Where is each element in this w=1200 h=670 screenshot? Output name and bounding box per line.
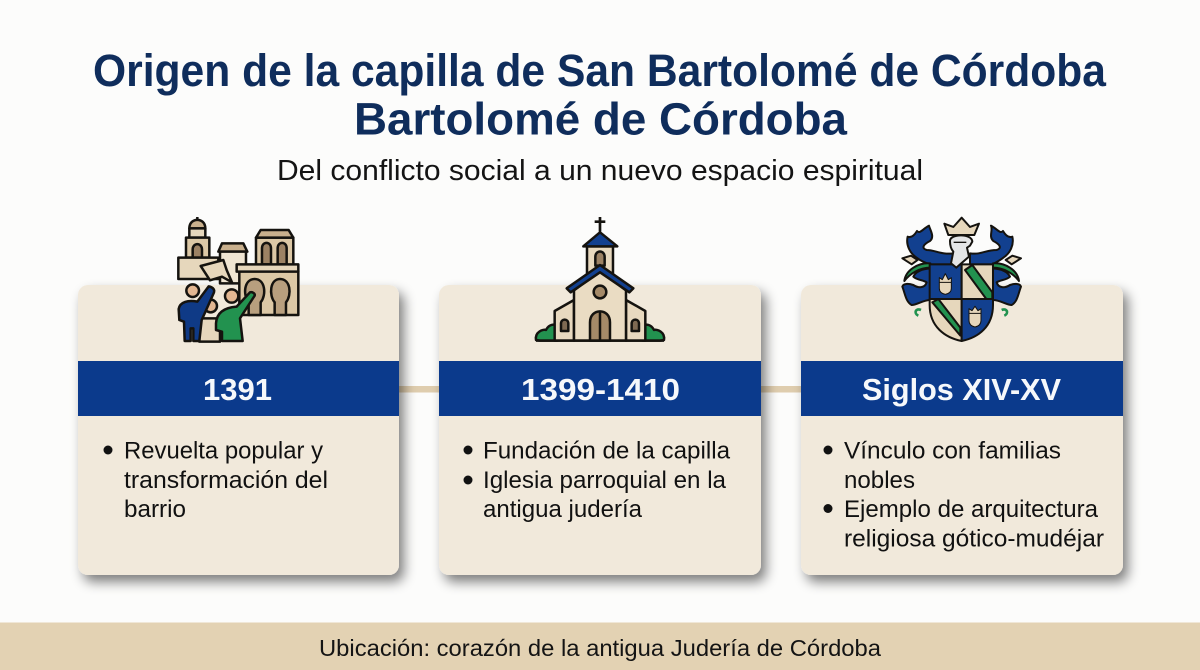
bullet list: Siglos XIV-XV: Ejemplo de arquitectura: [844, 496, 1099, 523]
panel: 1399-1410: [439, 285, 761, 575]
footer band: [0, 622, 1200, 670]
year band: 1399-1410: [439, 361, 761, 416]
title: Bartolomé de Córdoba: [354, 94, 848, 144]
icon: coat of arms: [902, 218, 1021, 341]
bullet list: Siglos XIV-XV: Vínculo con familias: [844, 438, 1061, 464]
panel: Siglos XIV-XV: [801, 285, 1123, 575]
panel: 1391: [78, 285, 399, 575]
year band: Siglos XIV-XV: [801, 361, 1123, 416]
bullet list: 1391: barrio: [124, 496, 186, 523]
year band: 1391: [78, 361, 399, 416]
icon: revolt in the quarter: [178, 217, 298, 342]
bullet list: 1399-1410: [464, 438, 731, 523]
footer band: Ubicación: corazón de la antigua Judería de Córdoba: [319, 635, 881, 661]
bullet list: Siglos XIV-XV: nobles: [844, 467, 915, 494]
title: Origen de la capilla de San Bartolomé de Córdoba: [93, 45, 1107, 96]
title: [93, 45, 1107, 144]
bullet list: 1399-1410: Iglesia parroquial en la: [483, 467, 727, 494]
subtitle: Del conflicto social a un nuevo espacio espiritual: [277, 155, 923, 187]
connector: 1399-1410 to Siglos XIV-XV: [757, 386, 805, 392]
year band: 1399-1410: 1399-1410: [521, 372, 680, 407]
bullet list: 1391: Revuelta popular y: [124, 438, 323, 464]
connector: 1391 to 1399-1410: [395, 386, 443, 392]
year band: 1391: 1391: [203, 372, 272, 407]
bullet list: 1399-1410: Fundación de la capilla: [483, 438, 731, 464]
icon: church: [536, 217, 664, 341]
bullet list: 1391: transformación del: [124, 467, 328, 494]
bullet list: Siglos XIV-XV: [824, 438, 1104, 552]
bullet list: 1399-1410: antigua judería: [483, 496, 643, 523]
bullet list: 1391: [104, 438, 328, 523]
bullet list: Siglos XIV-XV: religiosa gótico-mudéjar: [844, 526, 1104, 552]
year band: Siglos XIV-XV: Siglos XIV-XV: [862, 372, 1061, 407]
